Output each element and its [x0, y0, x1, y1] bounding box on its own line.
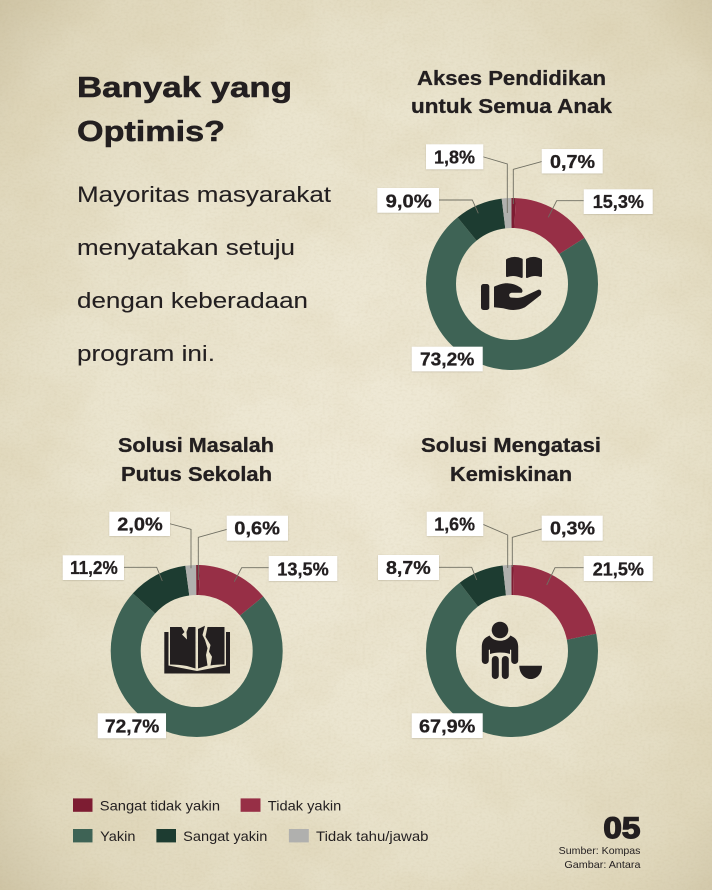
source credits: Sumber: Kompas [559, 845, 640, 857]
panel: Akses Pendidikan [377, 67, 653, 371]
data labels: 2,0% [117, 514, 163, 535]
title [77, 72, 292, 148]
legend: Yakin [100, 828, 135, 844]
icon: person with begging bowl [482, 622, 542, 679]
data labels: 0,3% [550, 518, 595, 539]
heading: Kemiskinan [450, 463, 572, 486]
heading [118, 434, 274, 486]
heading [421, 434, 601, 486]
heading: Putus Sekolah [121, 463, 272, 486]
data labels: 72,7% [105, 715, 159, 736]
data labels: 0,6% [234, 518, 280, 539]
heading: Solusi Mengatasi [421, 434, 601, 457]
source credits [559, 845, 641, 871]
data labels [63, 512, 337, 738]
legend: Sangat tidak yakin [100, 798, 220, 814]
legend [73, 798, 429, 844]
data labels: 21,5% [593, 558, 644, 579]
data labels: 0,7% [550, 151, 595, 172]
data labels: 11,2% [70, 557, 118, 578]
intro text block: menyatakan setuju [77, 235, 295, 260]
panel: Solusi Masalah Putus Sekolah [63, 434, 337, 738]
data labels [378, 512, 653, 738]
icon: torn open book [164, 626, 230, 674]
data labels: 13,5% [277, 558, 329, 579]
heading [411, 67, 613, 118]
leader lines [431, 522, 593, 585]
leader lines [118, 522, 273, 582]
intro text block: dengan keberadaan [77, 288, 308, 313]
data labels: 15,3% [593, 191, 644, 212]
donut chart [441, 213, 583, 355]
leader lines [432, 155, 593, 217]
data labels: 67,9% [419, 715, 475, 736]
page number: 05 [603, 812, 640, 845]
donut chart [441, 580, 583, 722]
title: Optimis? [77, 116, 225, 148]
intro text block: program ini. [77, 341, 215, 366]
title: Banyak yang [77, 72, 292, 104]
data labels: 73,2% [420, 349, 474, 370]
intro text block [77, 182, 331, 366]
donut chart [126, 580, 268, 722]
icon: hand holding open book [481, 258, 541, 310]
legend: Sangat yakin [183, 828, 267, 844]
data labels: 8,7% [386, 557, 431, 578]
data labels: 9,0% [386, 190, 432, 211]
heading: Akses Pendidikan [417, 67, 606, 90]
data labels: 1,8% [434, 146, 475, 167]
source credits: Gambar: Antara [564, 859, 641, 871]
heading: Solusi Masalah [118, 434, 274, 457]
legend: Tidak yakin [268, 798, 341, 814]
panel: Solusi Mengatasi Kemiskinan [378, 434, 653, 738]
data labels [377, 144, 653, 371]
legend: Tidak tahu/jawab [316, 828, 429, 844]
heading: untuk Semua Anak [411, 95, 613, 118]
data labels: 1,6% [434, 514, 475, 535]
intro text block: Mayoritas masyarakat [77, 182, 331, 207]
